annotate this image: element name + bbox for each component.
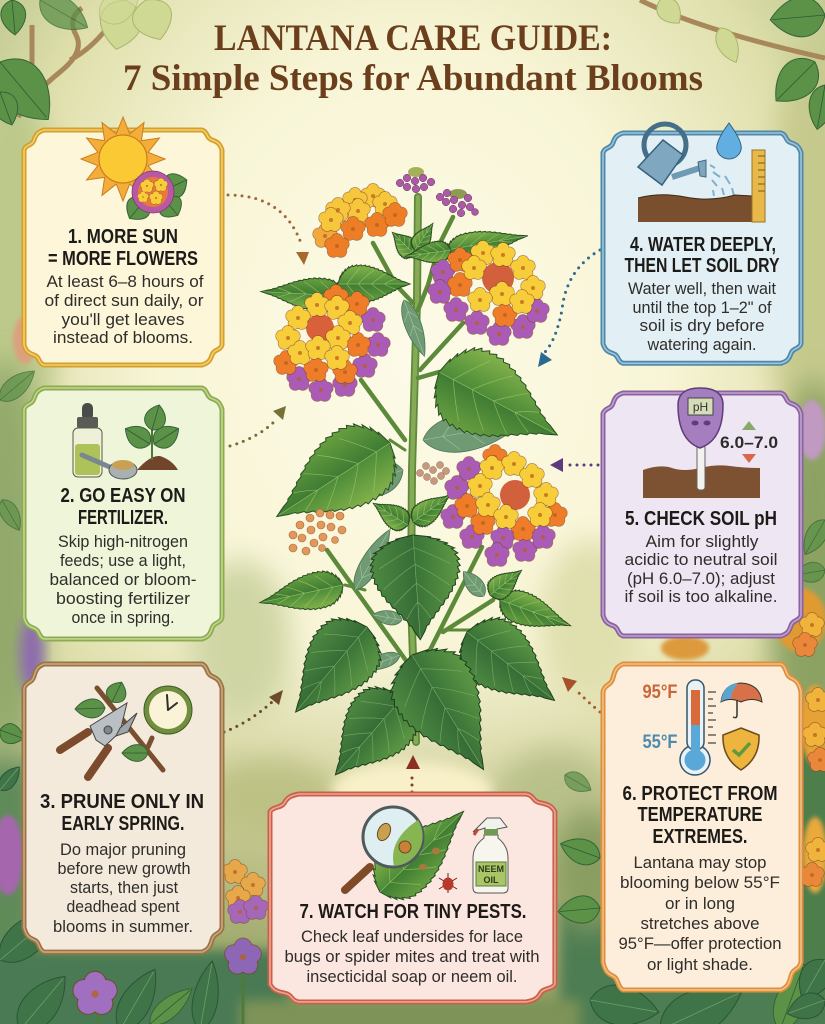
icon: dropper bottle and seedling — [73, 402, 184, 479]
panel: step 5 soil pH — [603, 388, 801, 636]
text block: starts, then just — [70, 878, 178, 897]
icon: pruners and clock — [60, 678, 192, 777]
leaves — [255, 218, 577, 798]
panel: step 1 sun — [24, 117, 222, 365]
title: 7 Simple Steps for Abundant Blooms — [123, 58, 703, 99]
icon: magnifier, leaf, mite and spray bottle: OIL — [484, 875, 499, 885]
text block: insecticidal soap or neem oil. — [306, 967, 518, 986]
text block — [284, 927, 540, 986]
heading: 2. GO EASY ON — [60, 485, 186, 507]
flower cluster: lower right — [441, 445, 567, 566]
icon: thermometer, umbrella and shield: 55°F — [642, 732, 678, 753]
heading — [60, 485, 186, 529]
text block: blooms in summer. — [53, 917, 193, 936]
text block: before new growth — [58, 859, 190, 878]
text block: Lantana may stop — [634, 853, 766, 872]
text block: balanced or bloom- — [50, 570, 196, 589]
text block: deadhead spent — [66, 897, 180, 916]
flower cluster: top orange — [313, 184, 407, 257]
arrow: step 7 — [406, 755, 420, 792]
heading: 3. PRUNE ONLY IN — [40, 791, 204, 813]
stems — [327, 197, 493, 742]
panel: step 7 pests — [270, 791, 555, 1002]
icon: thermometer, umbrella and shield — [642, 680, 762, 775]
text block: if soil is too alkaline. — [624, 587, 778, 606]
heading: = MORE FLOWERS — [48, 248, 198, 270]
text block — [618, 853, 782, 974]
text block — [628, 279, 776, 354]
panel: step 2 fertilizer — [24, 388, 222, 639]
text block: Water well, then wait — [628, 279, 776, 298]
arrow: step 4 — [538, 250, 600, 367]
text block: feeds; use a light, — [60, 551, 186, 570]
icon: thermometer, umbrella and shield: 95°F — [642, 682, 678, 703]
icon: magnifier, leaf, mite and spray bottle — [345, 791, 508, 913]
panel: step 3 pruning — [24, 664, 222, 952]
text block: boosting fertilizer — [56, 589, 190, 608]
heading — [624, 234, 780, 277]
icon: magnifier, leaf, mite and spray bottle: NEEM — [478, 864, 504, 874]
frame — [603, 664, 801, 990]
arrow: step 6 — [562, 677, 600, 712]
text block: Do major pruning — [60, 840, 186, 859]
text block: watering again. — [647, 335, 756, 354]
text block: Check leaf undersides for lace — [301, 927, 523, 946]
text block: acidic to neutral soil — [624, 550, 778, 569]
arrow: step 3 — [224, 690, 283, 732]
icon: pH meter in soil: pH — [693, 400, 708, 414]
frame — [24, 130, 222, 365]
text block: until the top 1–2" of — [632, 298, 772, 317]
frame — [603, 133, 801, 363]
icon: pH meter in soil — [643, 388, 778, 498]
flower buds — [289, 167, 478, 555]
heading: 1. MORE SUN — [68, 226, 178, 248]
text block: blooming below 55°F — [620, 873, 780, 892]
panel: step 4 watering — [603, 123, 801, 363]
frame — [24, 388, 222, 639]
heading: THEN LET SOIL DRY — [624, 255, 780, 277]
frame — [603, 393, 801, 636]
text block: soil is dry before — [640, 316, 764, 335]
heading: 5. CHECK SOIL pH — [625, 508, 777, 530]
heading: EARLY SPRING. — [62, 813, 184, 835]
arrow: step 1 — [228, 195, 309, 265]
frame — [270, 794, 555, 1002]
text block: Aim for slightly — [646, 532, 759, 551]
heading — [622, 783, 778, 848]
background flowers — [0, 316, 825, 1024]
heading: TEMPERATURE — [638, 804, 762, 826]
text block: or in long — [665, 894, 735, 913]
text block: 95°F—offer protection — [618, 934, 782, 953]
heading: 7. WATCH FOR TINY PESTS. — [300, 901, 526, 923]
flower cluster: left — [274, 285, 390, 401]
text block: bugs or spider mites and treat with — [284, 947, 540, 966]
text block: of direct sun daily, or — [44, 291, 204, 310]
flower cluster: right — [428, 241, 549, 345]
text block — [624, 532, 778, 606]
arrow: step 2 — [230, 406, 286, 446]
heading: FERTILIZER. — [78, 507, 168, 529]
text block — [53, 840, 193, 936]
heading: 6. PROTECT FROM — [622, 783, 778, 805]
heading — [48, 226, 198, 270]
arrow: step 5 — [550, 458, 598, 472]
text block: once in spring. — [72, 608, 174, 627]
text block — [50, 532, 196, 627]
text block: Skip high-nitrogen — [58, 532, 188, 551]
panel: step 6 temperature — [603, 664, 801, 990]
icon: sun with flower — [81, 117, 192, 226]
text block: At least 6–8 hours of — [46, 272, 204, 291]
muted back leaves — [335, 297, 525, 675]
text block: or light shade. — [647, 955, 753, 974]
icon: pH meter in soil: 6.0–7.0 — [720, 433, 778, 452]
frame — [24, 664, 222, 952]
text block: stretches above — [640, 914, 760, 933]
illustration: lantana plant — [255, 167, 577, 798]
title — [123, 18, 703, 99]
heading: EXTREMES. — [652, 826, 748, 848]
text block — [44, 272, 204, 347]
icon: watering can, drop, soil and ruler — [638, 123, 765, 222]
heading — [40, 791, 204, 835]
text block: instead of blooms. — [53, 328, 193, 347]
heading: 4. WATER DEEPLY, — [630, 234, 776, 256]
title: LANTANA CARE GUIDE: — [214, 18, 612, 59]
text block: you'll get leaves — [62, 310, 184, 329]
text block: (pH 6.0–7.0); adjust — [627, 569, 775, 588]
